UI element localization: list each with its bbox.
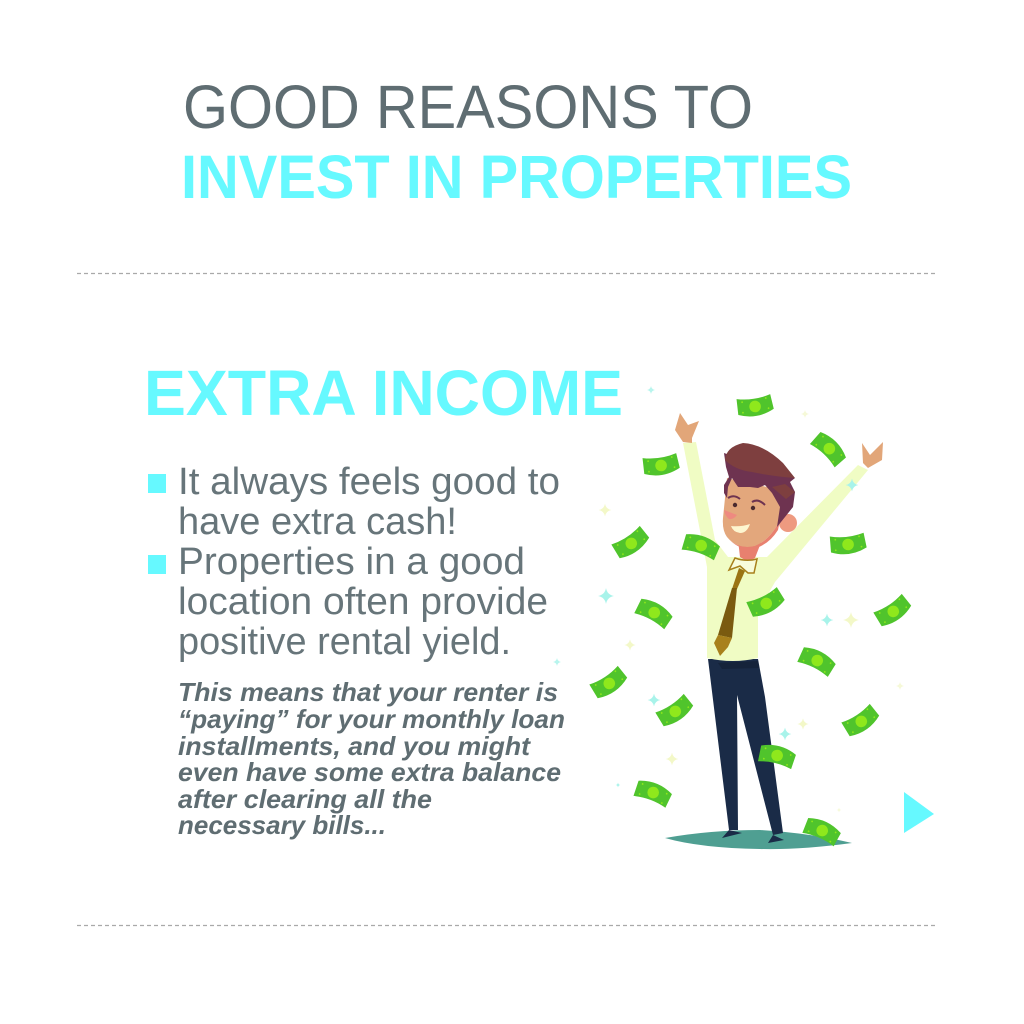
hair lock — [772, 484, 795, 499]
hair back — [724, 453, 795, 527]
hair dome — [725, 443, 795, 478]
neck — [738, 540, 762, 562]
belt shadow — [718, 661, 759, 669]
heading: extra income: EXTRA INCOME — [144, 357, 623, 429]
illustration: man — [665, 413, 883, 849]
sparkles — [553, 386, 904, 812]
collar — [729, 558, 757, 573]
money bills — [589, 393, 913, 848]
title: INVEST IN PROPERTIES — [181, 143, 852, 211]
face shadow — [727, 520, 780, 549]
shirt and arms — [683, 442, 868, 661]
ground shadow — [665, 830, 852, 849]
arrow — [904, 792, 934, 833]
smile — [731, 524, 750, 533]
shoes — [722, 830, 784, 843]
italic note: even have some extra balance — [178, 757, 561, 787]
bullet list — [148, 461, 560, 663]
italic note: necessary bills... — [178, 810, 386, 840]
right hand — [862, 442, 883, 468]
nose — [724, 510, 737, 519]
bullet list: Properties in a good — [178, 541, 525, 583]
trousers — [708, 659, 783, 835]
bullet list: have extra cash! — [178, 501, 457, 543]
title: GOOD REASONS TO — [183, 73, 753, 141]
bullet list: It always feels good to — [178, 461, 560, 503]
ear — [779, 514, 797, 532]
bullet list: positive rental yield. — [178, 621, 511, 663]
italic note: “paying” for your monthly loan — [178, 704, 565, 734]
italic note: after clearing all the — [178, 784, 432, 814]
tie — [714, 568, 745, 656]
eyes and brows — [733, 503, 737, 507]
italic note — [178, 677, 565, 840]
italic note: installments, and you might — [178, 731, 531, 761]
face — [723, 478, 780, 547]
italic note: This means that your renter is — [178, 677, 558, 707]
bullet list: location often provide — [178, 581, 548, 623]
title — [181, 73, 852, 211]
left hand — [675, 413, 699, 443]
